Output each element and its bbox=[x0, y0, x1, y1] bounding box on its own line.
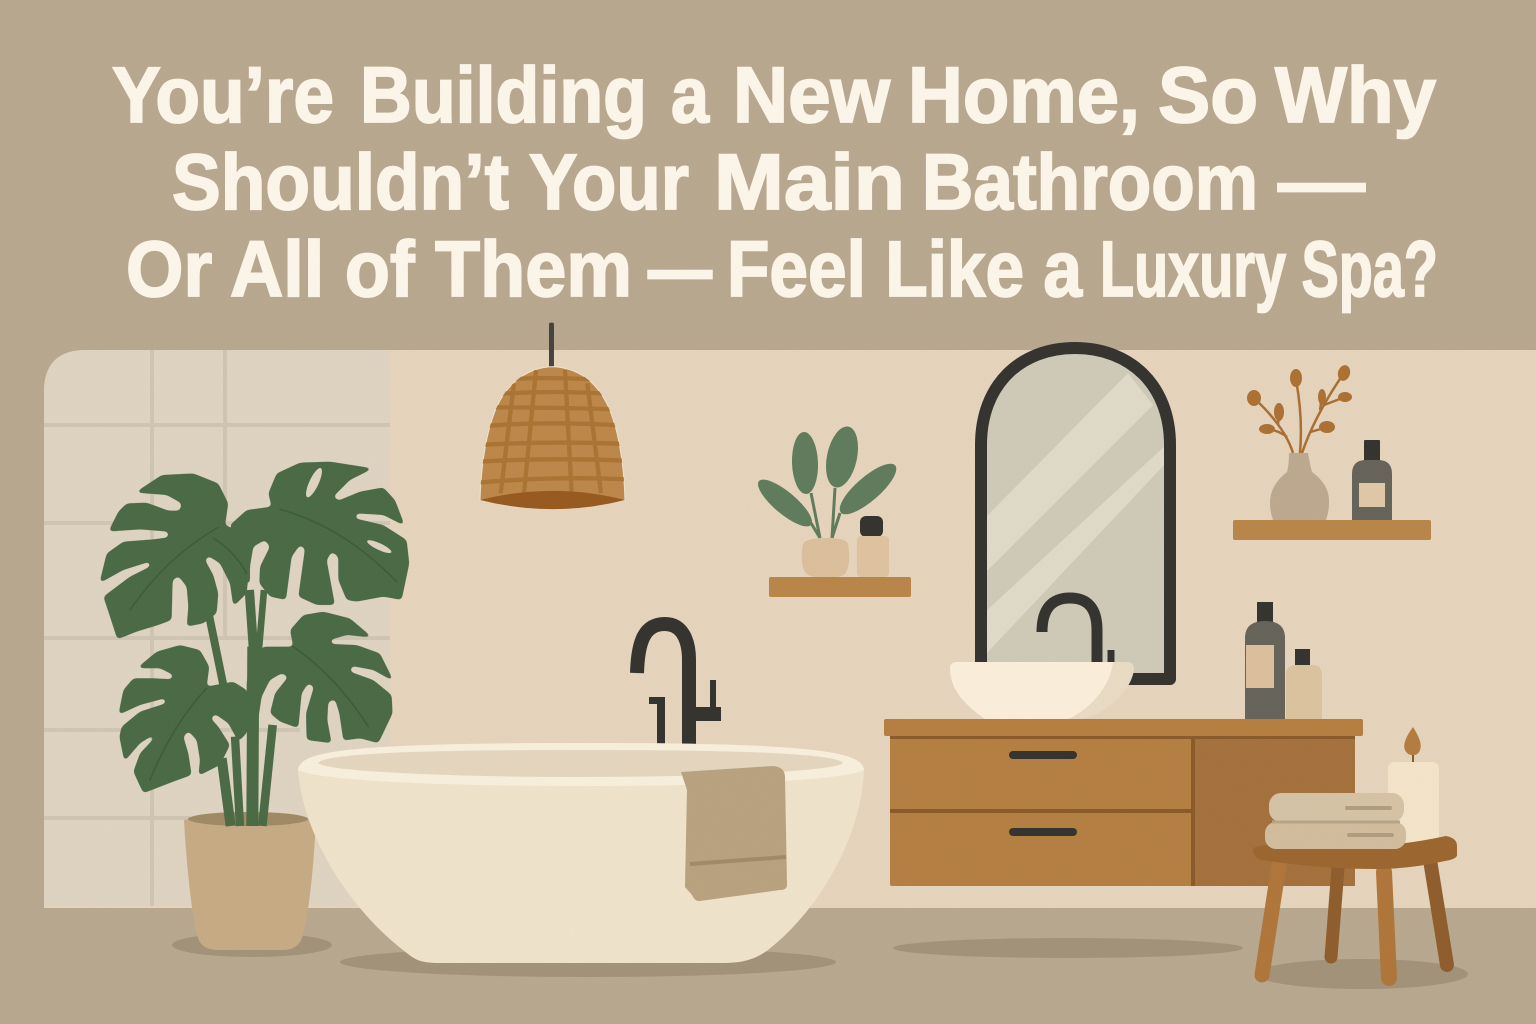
wooden stool bbox=[1253, 836, 1457, 978]
title: Or All of Them bbox=[126, 224, 632, 313]
bathtub bbox=[298, 743, 864, 963]
small bottle on shelf bbox=[857, 516, 889, 577]
title: So bbox=[1158, 50, 1258, 139]
vanity shadow bbox=[893, 938, 1243, 958]
drawer handles bbox=[1009, 751, 1077, 836]
vanity cabinet bbox=[884, 719, 1363, 886]
wood shelf left bbox=[769, 577, 911, 597]
shelf with vase and bottle bbox=[1233, 364, 1431, 540]
stool shadow bbox=[1256, 959, 1468, 989]
stool seat bbox=[1253, 836, 1457, 869]
bathtub shadow bbox=[340, 947, 836, 977]
monstera leaf upper left bbox=[99, 473, 250, 639]
shelf with plant bbox=[752, 424, 911, 597]
dried branches in vase bbox=[1254, 373, 1345, 453]
vessel sink bbox=[950, 662, 1134, 719]
title: New bbox=[733, 50, 891, 139]
leaf holes bbox=[303, 466, 393, 555]
title: Your bbox=[529, 137, 689, 226]
dark bottle on shelf bbox=[1352, 440, 1392, 520]
title: — bbox=[1278, 137, 1365, 226]
short beige bottle bbox=[1286, 649, 1322, 719]
candle bbox=[1388, 727, 1439, 842]
title: You’re bbox=[112, 50, 334, 139]
title: Shouldn’t bbox=[172, 137, 509, 226]
monstera leaf lower right bbox=[247, 612, 394, 743]
wood shelf right bbox=[1233, 520, 1431, 540]
title bbox=[112, 50, 1438, 313]
monstera leaf upper right bbox=[230, 462, 409, 605]
tiled wall panel bbox=[44, 350, 390, 906]
countertop bbox=[884, 719, 1363, 736]
leaf veins bbox=[130, 509, 397, 780]
title: Home, bbox=[908, 50, 1140, 139]
sink faucet bbox=[1042, 598, 1111, 665]
title: — bbox=[648, 224, 712, 313]
monstera plant bbox=[99, 462, 409, 826]
pendant lamp bbox=[478, 323, 627, 509]
folded towels bbox=[1265, 793, 1406, 849]
small potted plant bbox=[752, 424, 903, 577]
stool legs bbox=[1262, 860, 1447, 978]
plant pot bbox=[184, 812, 316, 950]
towel on bathtub bbox=[681, 766, 787, 901]
plant shadow bbox=[172, 933, 332, 957]
wall bbox=[44, 350, 1536, 908]
title: a bbox=[671, 50, 710, 139]
monstera leaf lower left bbox=[118, 645, 253, 793]
ceramic vase bbox=[1270, 453, 1329, 520]
title: Bathroom bbox=[922, 137, 1258, 226]
tub faucet bbox=[637, 624, 721, 745]
plant stems bbox=[209, 590, 273, 826]
title: Feel Like a bbox=[727, 224, 1083, 313]
title: Main bbox=[714, 137, 905, 226]
arched mirror bbox=[981, 348, 1170, 679]
title: Building bbox=[360, 50, 647, 139]
tall dark bottle bbox=[1245, 602, 1285, 719]
floor bbox=[0, 908, 1536, 1024]
title: Why bbox=[1275, 50, 1436, 139]
